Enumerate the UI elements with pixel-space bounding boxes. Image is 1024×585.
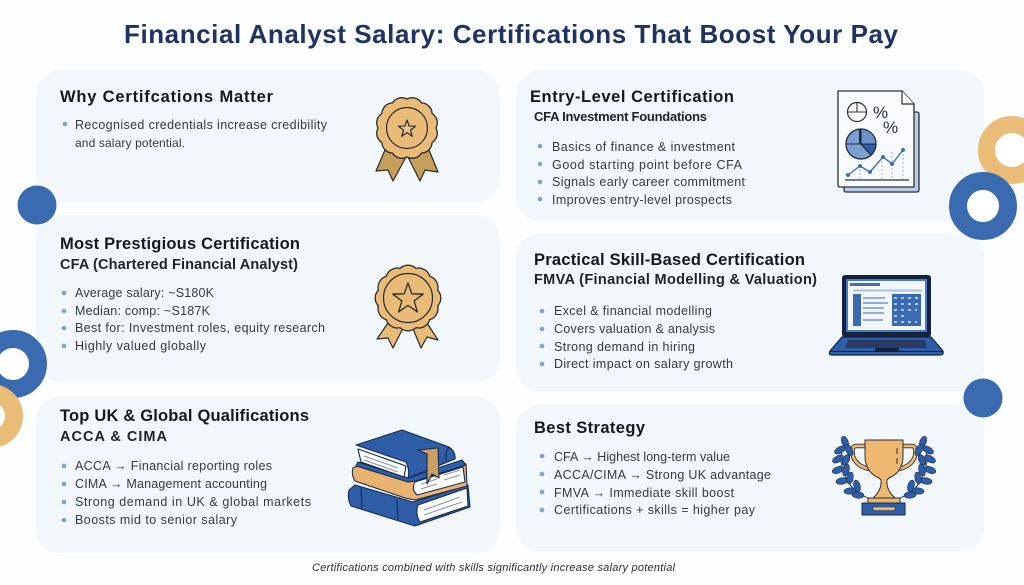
decoration: blue ring right (958, 181, 1008, 231)
bullet list: best strategy: FMVA → Immediate skill boost (554, 486, 735, 500)
heading: most prestigious certification: Most Prestigious Certification (60, 235, 300, 253)
bullet list: FMVA: Covers valuation & analysis (554, 322, 715, 336)
icon: stack of books (348, 430, 470, 526)
icon: financial report document: % (883, 118, 898, 137)
bullet list: entry-level: Good starting point before CFA (552, 158, 743, 172)
bullet list: ACCA and CIMA (62, 459, 311, 527)
footer note: Certifications combined with skills significantly increase salary potential (312, 562, 676, 574)
heading: entry-level certification: Entry-Level Certification (530, 88, 734, 106)
subheading: FMVA: FMVA (Financial Modelling & Valuation) (534, 272, 817, 288)
panel: most prestigious certification (36, 215, 500, 382)
icon: laptop with spreadsheet (829, 275, 943, 355)
bullet list: CFA (62, 286, 325, 353)
bullet list: why certifications matter: and salary potential. (75, 136, 185, 150)
icon: financial report document (838, 91, 919, 192)
decoration: blue dot right (964, 378, 1002, 418)
bullet list: FMVA (540, 304, 733, 371)
panel: why certifications matter (36, 70, 500, 202)
bullet list: entry-level: Improves entry-level prospects (552, 193, 732, 207)
icon: gold medal (369, 259, 447, 348)
bullet list: CFA: Best for: Investment roles, equity research (75, 321, 325, 335)
decoration: gold ring right (986, 124, 1024, 176)
panel: best strategy (516, 405, 984, 551)
heading: why certifications matter: Why Certifcations Matter (60, 88, 274, 106)
bullet list: entry-level (538, 140, 746, 207)
icon: financial report document: % (873, 103, 888, 122)
bullet list: best strategy: Certifications + skills = higher pay (554, 503, 756, 517)
bullet list: best strategy: ACCA/CIMA → Strong UK advantage (554, 468, 771, 482)
bullet list: ACCA and CIMA: ACCA → Financial reporting roles (75, 459, 272, 473)
bullet list: entry-level: Signals early career commitment (552, 175, 746, 189)
bullet list: why certifications matter: Recognised credentials increase credibility (75, 118, 328, 132)
heading: top UK and global qualifications: Top UK & Global Qualifications (60, 407, 309, 425)
subheading: CFA Investment Foundations: CFA Investment Foundations (534, 109, 707, 124)
decoration: blue ring left (0, 339, 38, 389)
decoration: blue dot left (18, 186, 56, 224)
heading: practical skill-based certification: Practical Skill-Based Certification (534, 251, 805, 269)
bullet list: entry-level: Basics of finance & investment (552, 140, 736, 154)
icon: trophy with laurels (831, 435, 937, 515)
bullet list: FMVA: Excel & financial modelling (554, 304, 712, 318)
decoration: gold ring left (0, 393, 14, 439)
bullet list: best strategy: CFA → Highest long-term value (554, 450, 730, 464)
bullet list: ACCA and CIMA: CIMA → Management accounting (75, 477, 267, 491)
bullet list: FMVA: Direct impact on salary growth (554, 357, 733, 371)
title: Financial Analyst Salary: Certifications That Boost Your Pay (124, 19, 899, 49)
subheading: ACCA and CIMA: ACCA & CIMA (60, 429, 168, 445)
icon: bronze medal (376, 98, 438, 181)
subheading: CFA: CFA (Chartered Financial Analyst) (60, 257, 298, 273)
bullet list: why certifications matter (63, 118, 328, 150)
bullet list: ACCA and CIMA: Strong demand in UK & global markets (75, 495, 311, 509)
panel: practical skill-based certification (516, 234, 984, 391)
bullet list: ACCA and CIMA: Boosts mid to senior salary (75, 513, 238, 527)
bullet list: CFA: Median: comp: ~S187K (75, 304, 211, 318)
heading: best strategy: Best Strategy (534, 419, 646, 437)
bullet list: best strategy (540, 450, 771, 517)
bullet list: CFA: Highly valued globally (75, 339, 207, 353)
panel: entry-level certification (516, 70, 984, 221)
panel: top UK and global qualifications (36, 397, 500, 553)
bullet list: CFA: Average salary: ~S180K (75, 286, 215, 300)
bullet list: FMVA: Strong demand in hiring (554, 340, 695, 354)
